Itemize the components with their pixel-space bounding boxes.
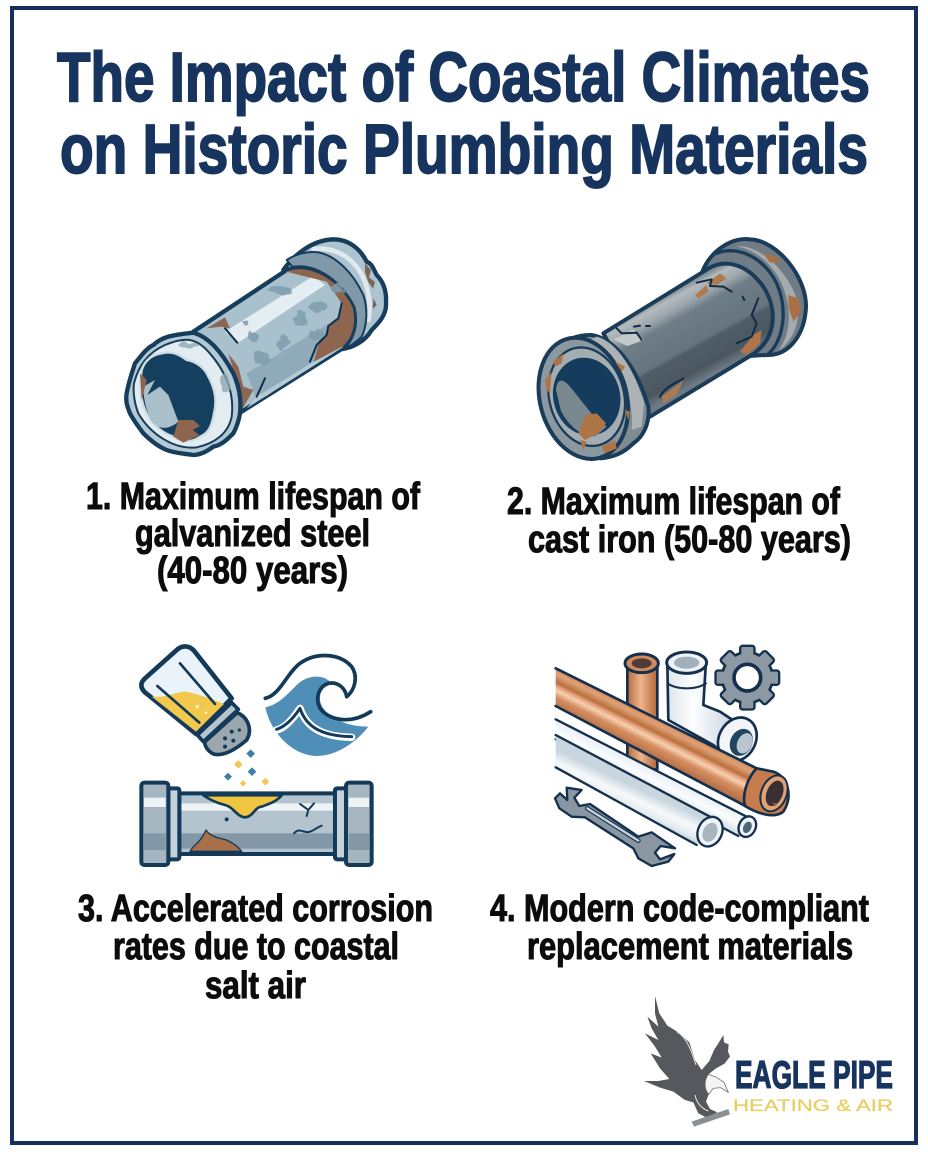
label: galvanized steel	[86, 476, 420, 592]
icon: salt grains	[224, 749, 269, 787]
label: corrosion	[78, 888, 433, 1007]
icon: wave	[265, 656, 371, 756]
icon: PVC elbow	[667, 652, 764, 768]
icon: gear	[717, 647, 778, 708]
pipe body	[603, 264, 773, 417]
panel: modern materials	[490, 647, 869, 968]
icon: salt shaker, wave and corroded pipe	[141, 646, 372, 865]
far flange	[702, 239, 806, 356]
icon: eagle	[644, 996, 730, 1127]
icon: copper pipe, PVC fittings, wrench and gear	[555, 647, 793, 866]
label: galvanized steel: 1. Maximum lifespan of	[86, 476, 420, 518]
icon: corroded pipe	[141, 783, 372, 865]
label: modern materials	[490, 888, 869, 968]
logo: Eagle Pipe Heating & Air	[644, 996, 893, 1127]
label: cast iron: 2. Maximum lifespan of	[507, 481, 840, 523]
panel: galvanized steel	[86, 239, 420, 592]
label: corrosion: salt air	[205, 965, 306, 1007]
pipe body	[193, 267, 355, 412]
icon: corroded cast iron pipe	[526, 239, 806, 469]
icon: salt shaker	[141, 646, 249, 755]
label: modern materials: replacement materials	[527, 926, 853, 968]
text: tagline: HEATING & AIR	[733, 1097, 893, 1115]
panel: cast iron	[507, 239, 851, 561]
label: cast iron	[507, 481, 851, 561]
label: galvanized steel: galvanized steel	[135, 513, 370, 555]
icon: upright copper pipe	[625, 654, 658, 769]
panel: corrosion from salt air	[78, 646, 433, 1007]
near flange	[126, 333, 240, 455]
label: corrosion: rates due to coastal	[113, 926, 399, 968]
icon: corroded galvanized steel pipe	[126, 239, 386, 455]
near flange	[540, 335, 649, 458]
icon: wrench	[555, 788, 675, 866]
label: galvanized steel: (40-80 years)	[157, 550, 348, 592]
label: cast iron: cast iron (50-80 years)	[528, 519, 851, 561]
icon: white tubes	[556, 719, 759, 852]
icon: long copper pipe	[556, 668, 793, 815]
label: corrosion: 3. Accelerated corrosion	[78, 888, 433, 930]
title	[57, 38, 870, 188]
